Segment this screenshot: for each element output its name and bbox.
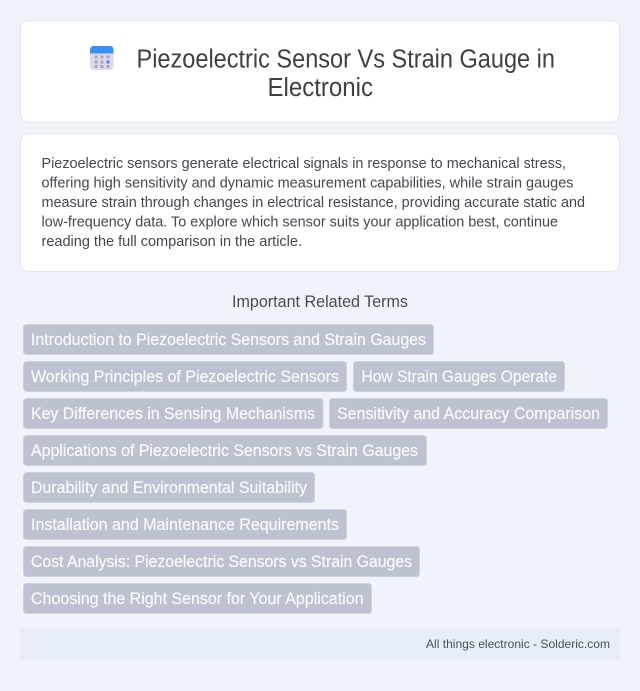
- tag: durability: Durability and Environmental Suitability: [31, 479, 308, 497]
- text block: summary: low-frequency data. To explore which sensor suits your application best, continue: [42, 214, 558, 230]
- text block: summary: Piezoelectric sensors generate electrical signals in response to mechanical stress,: [42, 156, 566, 172]
- tag: installation: [24, 510, 346, 540]
- text block: summary: [42, 156, 585, 250]
- tag: key differences: Key Differences in Sensing Mechanisms: [31, 405, 315, 423]
- title: [136, 46, 555, 102]
- tag: cost analysis: [24, 546, 420, 576]
- tag: introduction: Introduction to Piezoelectric Sensors and Strain Gauges: [31, 331, 426, 349]
- text block: summary: offering high sensitivity and dynamic measurement capabilities, while strain gauges: [42, 176, 574, 192]
- tag: choosing the right sensor: [24, 584, 372, 614]
- tag: durability: [24, 472, 314, 502]
- text block: summary: reading the full comparison in the article.: [42, 234, 302, 250]
- title: Piezoelectric Sensor Vs Strain Gauge in: [136, 46, 555, 74]
- tag: choosing the right sensor: Choosing the Right Sensor for Your Application: [31, 590, 364, 608]
- tag: working principles: Working Principles of Piezoelectric Sensors: [31, 368, 339, 386]
- tag: sensitivity and accuracy: Sensitivity and Accuracy Comparison: [337, 405, 600, 423]
- tag: working principles: [24, 362, 346, 392]
- tag: key differences: [24, 398, 323, 428]
- text block: summary: measure strain through changes in electrical resistance, providing accurate static and: [42, 195, 585, 211]
- panel: related term tags: [24, 324, 608, 614]
- panel: title header: [20, 20, 620, 122]
- tag: cost analysis: Cost Analysis: Piezoelectric Sensors vs Strain Gauges: [31, 553, 412, 571]
- tag: how strain gauges operate: [354, 362, 564, 392]
- heading: important related terms: Important Related Terms: [232, 293, 408, 311]
- footer: [20, 627, 620, 661]
- icon: calendar: [90, 46, 114, 70]
- panel: summary paragraph: [20, 134, 620, 272]
- tag: sensitivity and accuracy: [330, 398, 608, 428]
- title: Electronic: [268, 74, 373, 102]
- tag: applications: Applications of Piezoelectric Sensors vs Strain Gauges: [31, 442, 418, 460]
- tag: introduction: [24, 324, 434, 354]
- tag: applications: [24, 436, 426, 466]
- tag: installation: Installation and Maintenance Requirements: [31, 516, 339, 534]
- tag: how strain gauges operate: How Strain Gauges Operate: [362, 368, 557, 386]
- footer: All things electronic - Solderic.com: [426, 637, 610, 651]
